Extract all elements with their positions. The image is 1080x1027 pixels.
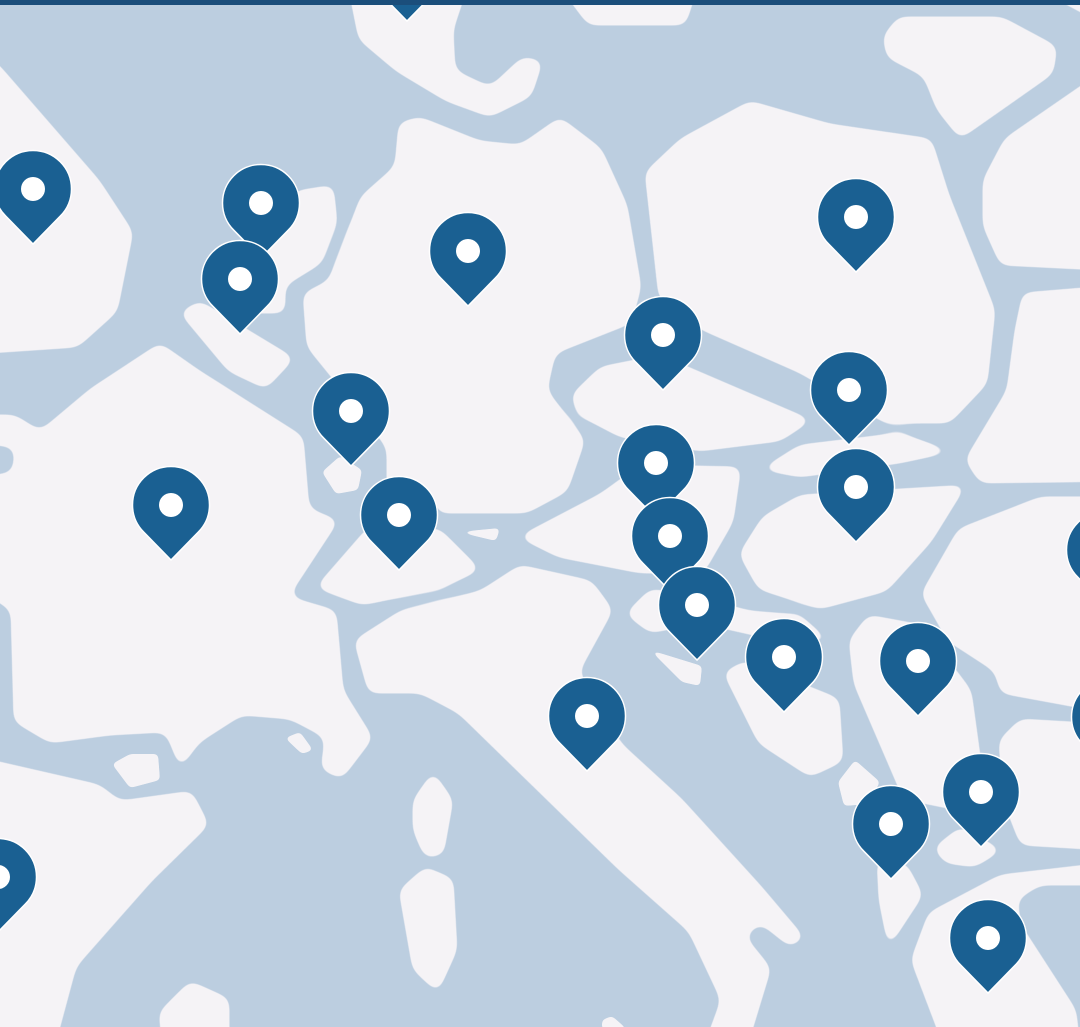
pin: Norway (222, 164, 300, 258)
pin: Slovenia (658, 566, 736, 660)
pin: right edge lower (1072, 678, 1080, 772)
pin: Serbia (880, 622, 956, 716)
pin: North Macedonia (852, 785, 930, 879)
pin: Germany north (430, 212, 507, 306)
pin: UK (0, 150, 72, 244)
pin: top edge (368, 0, 446, 21)
pin: right edge upper (1066, 511, 1080, 605)
top bar (0, 0, 1080, 5)
pin: Bulgaria (942, 753, 1020, 847)
pin: Netherlands (312, 372, 390, 466)
pin: Bosnia (746, 618, 822, 712)
pin: Czech Republic (618, 424, 694, 518)
pin: Poland east (624, 296, 702, 390)
pin: Ukraine north (810, 351, 888, 445)
pin: Austria (632, 497, 708, 591)
pin: Spain (0, 838, 37, 932)
pin: Ukraine south (818, 448, 894, 542)
pin: Belarus (818, 178, 894, 272)
pin: Italy (548, 677, 626, 771)
small islands (112, 456, 880, 1027)
pin: France (132, 466, 210, 560)
top bar overlay (0, 0, 1080, 5)
pin: Switzerland (360, 476, 438, 570)
pin: Denmark (202, 240, 279, 334)
pin: Greece (950, 899, 1026, 993)
